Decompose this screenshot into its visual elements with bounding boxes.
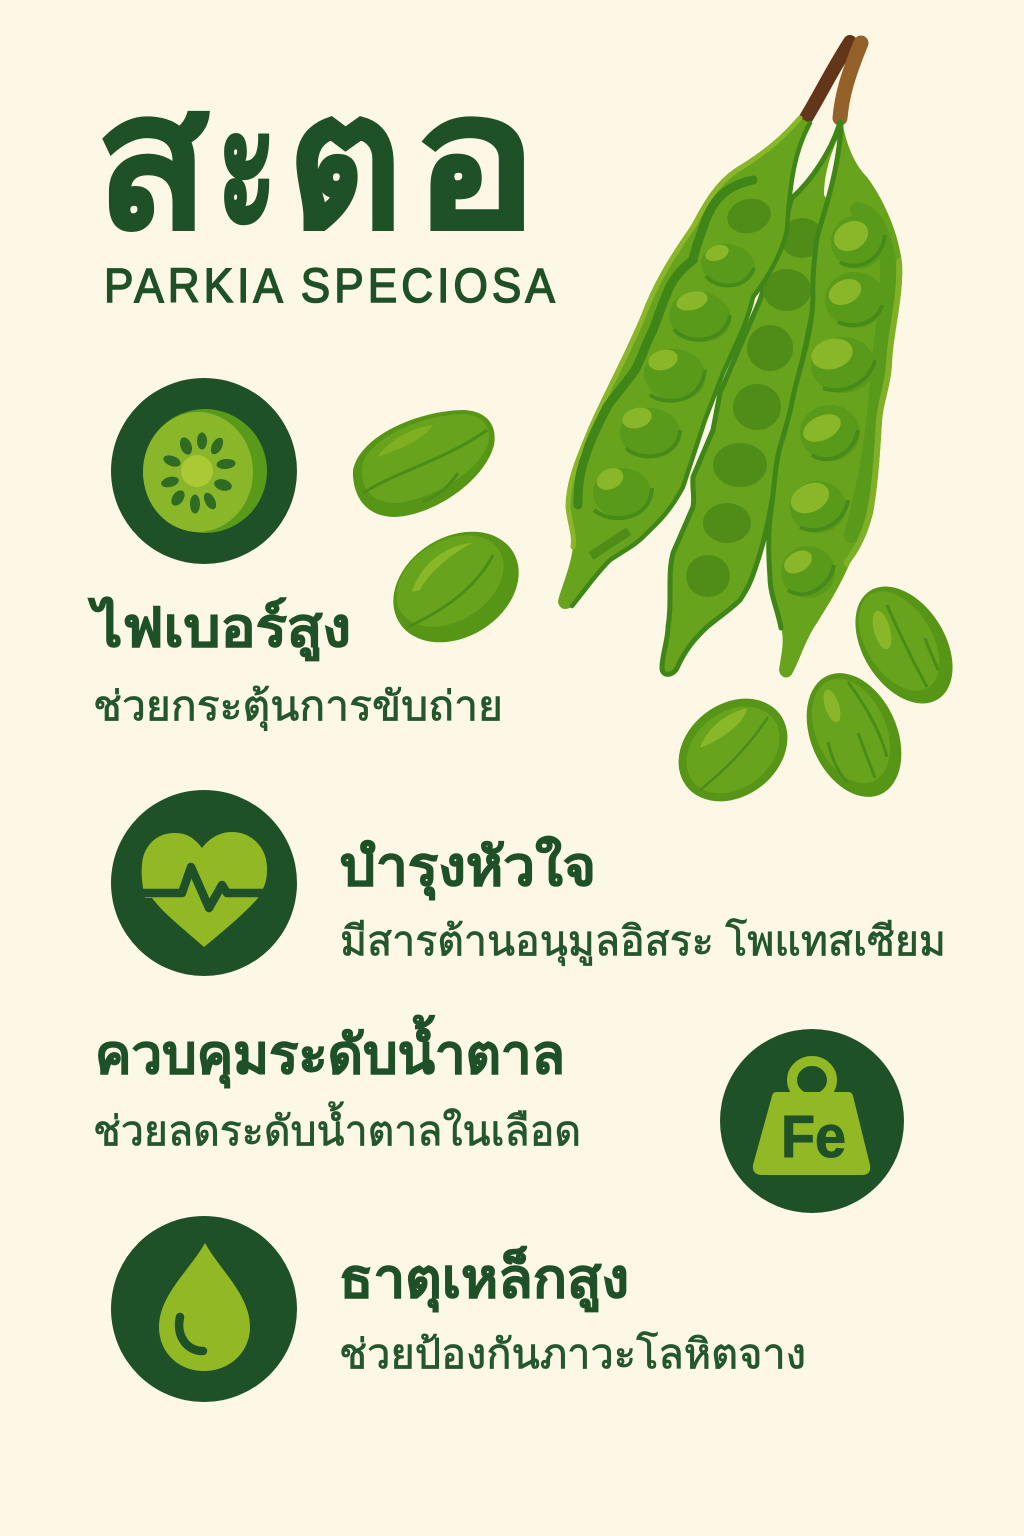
loose seed 1 <box>353 410 495 517</box>
heading: blood sugar: ควบคุมระดับน้ำตาล <box>95 1015 565 1089</box>
heading: fiber: ไฟเบอร์สูง <box>88 596 351 661</box>
icon: water drop <box>111 1216 297 1402</box>
subtitle: scientific name: PARKIA SPECIOSA <box>104 258 555 312</box>
loose seed 2 <box>373 509 539 665</box>
icon: fiber cross-section <box>111 378 297 564</box>
left pod <box>558 118 810 609</box>
loose seed 4 <box>788 658 920 812</box>
text: heart description: มีสารต้านอนุมูลอิสระ โพแทสเซียม <box>340 918 946 966</box>
stem: dark <box>806 42 850 118</box>
heading: iron: ธาตุเหล็กสูง <box>339 1247 629 1313</box>
text: blood sugar description: ช่วยลดระดับน้ำตาลในเลือด <box>93 1101 581 1154</box>
title: อ <box>412 56 538 268</box>
loose seed 3 <box>658 677 808 823</box>
loose seed 5 <box>835 569 973 721</box>
title: ส <box>96 56 209 268</box>
middle pod <box>662 122 840 674</box>
text: iron description: ช่วยป้องกันภาวะโลหิตจาง <box>339 1331 806 1377</box>
title: ต <box>287 56 403 268</box>
right pod <box>769 120 902 677</box>
icon: heart <box>111 790 297 976</box>
title <box>96 56 538 268</box>
icon: iron weight <box>720 1029 904 1213</box>
heading: heart: บำรุงหัวใจ <box>340 835 596 901</box>
icon: iron weight: Fe <box>781 1104 846 1170</box>
cream sliver between pods <box>824 138 838 201</box>
stem: light <box>840 43 861 118</box>
title: ะ <box>217 56 277 268</box>
text: fiber description: ช่วยกระตุ้นการขับถ่าย <box>93 683 503 731</box>
illustration: three petai pods <box>558 42 902 677</box>
